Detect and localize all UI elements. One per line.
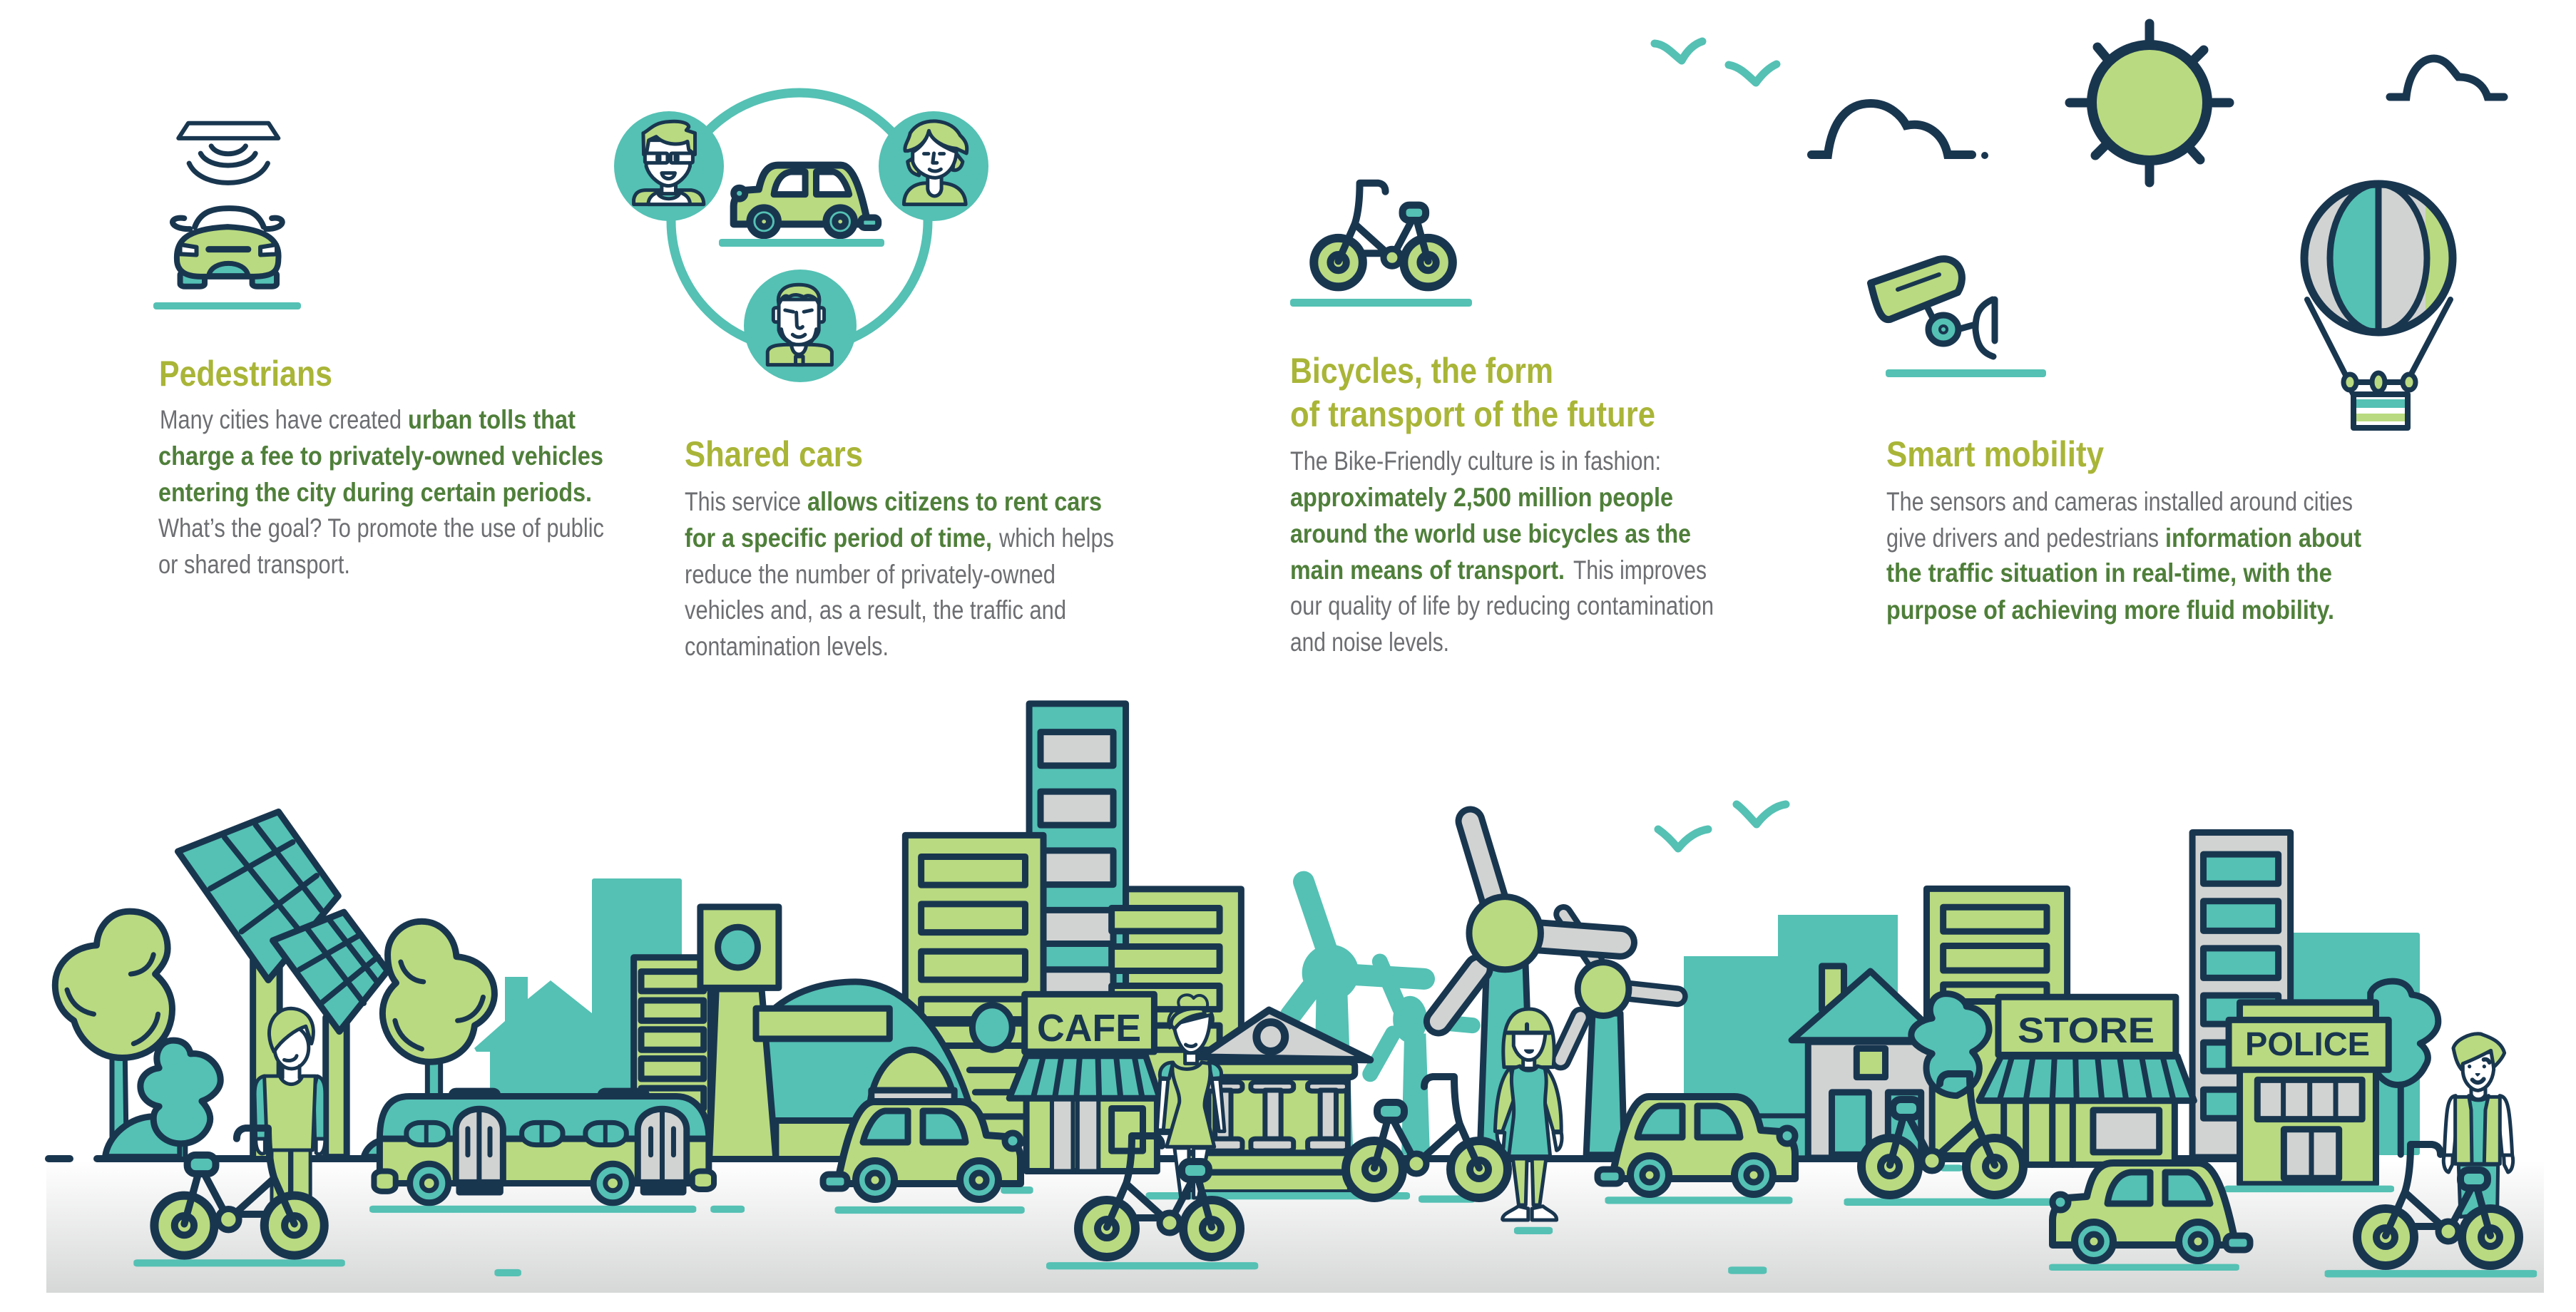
body text: the traffic situation in real-time, with the [1886, 558, 2332, 588]
body text: or shared transport. [158, 550, 350, 579]
body text: This improves [1573, 555, 1707, 585]
woman in green dress [1157, 995, 1225, 1198]
icon underline [1886, 369, 2046, 377]
teal tree [140, 1040, 220, 1159]
road marks [133, 1164, 2537, 1277]
icon underline [1290, 299, 1472, 307]
turbine large [1438, 821, 1620, 1155]
road surface [46, 1161, 2544, 1293]
store [1979, 997, 2194, 1164]
bicycle: right, with man [2357, 1144, 2519, 1266]
power plant: dome, tower and banner [634, 907, 983, 1159]
solar panel large [178, 811, 338, 980]
body text: information about [2165, 523, 2361, 553]
woman in teal dress [1495, 1009, 1562, 1220]
body text: Many cities have created [160, 405, 402, 434]
body text: reduce the number of privately-owned [685, 560, 1056, 589]
car near cafe [823, 1102, 1021, 1199]
body text: our quality of life by reducing contamination [1290, 591, 1714, 620]
person with beard [767, 285, 832, 365]
body text: The sensors and cameras installed around cities [1886, 487, 2353, 516]
tree 2 [382, 921, 494, 1096]
body text: main means of transport. [1290, 555, 1565, 585]
body text: for a specific period of time, [685, 523, 992, 553]
body text: This service [685, 487, 801, 516]
body text: give drivers and pedestrians [1886, 523, 2159, 553]
tower [710, 989, 776, 1159]
right green building [1112, 889, 1241, 1132]
body text: approximately 2,500 million people [1290, 483, 1673, 512]
police sign text: POLICE [2245, 1025, 2370, 1062]
solar panel small [273, 912, 388, 1032]
body text: and noise levels. [1290, 627, 1449, 657]
mid-right houses and shops [1759, 832, 2438, 1184]
bicycle: by bank [1346, 1077, 1508, 1198]
ground line [48, 1155, 2346, 1162]
heading: of transport of the future [1290, 394, 1655, 434]
banner [756, 1008, 889, 1039]
body text: which helps [998, 523, 1114, 553]
man in vest [2443, 1034, 2513, 1217]
small dome kiosk [869, 1050, 955, 1107]
fence [1759, 1116, 1811, 1158]
body text: The Bike-Friendly culture is in fashion: [1290, 446, 1661, 476]
house [1792, 971, 1943, 1158]
body text [1290, 446, 1714, 657]
solar panel posts [253, 957, 347, 1159]
man standing with bicycle [255, 1008, 325, 1201]
sky: hot-air balloon [2304, 184, 2453, 428]
person with wavy hair [904, 121, 967, 205]
panel: pedestrians [153, 123, 604, 579]
body text: urban tolls that [408, 405, 576, 434]
icon: toll sensor and car [173, 123, 282, 287]
body text: vehicles and, as a result, the traffic and [685, 595, 1066, 625]
turbine small [1560, 914, 1677, 1155]
cafe sign text: CAFE [1037, 1007, 1141, 1050]
dome [762, 982, 983, 1159]
icon: sharing ring with people and car [614, 93, 988, 382]
panel: shared cars [614, 93, 1114, 661]
body text [685, 487, 1114, 661]
body text: around the world use bicycles as the [1290, 519, 1691, 548]
small bush behind bus [364, 1139, 387, 1157]
icon: shared car [734, 165, 879, 235]
heading: Bicycles, the form [1290, 351, 1553, 391]
grey tower [2192, 832, 2291, 1157]
foreground wind turbines [1438, 821, 1677, 1155]
bush [105, 1117, 182, 1157]
apartment block [634, 958, 710, 1123]
teal tree by store [1911, 994, 1989, 1096]
panel: smart mobility [1871, 259, 2361, 625]
body text: purpose of achieving more fluid mobility. [1886, 595, 2334, 625]
teal tower [1029, 704, 1126, 1020]
body text: What’s the goal? To promote the use of public [158, 513, 604, 543]
heading: Pedestrians [159, 354, 332, 394]
body text: entering the city during certain periods. [158, 478, 592, 507]
bus [374, 1091, 714, 1203]
sky: large cloud [1811, 103, 1988, 158]
police station [2229, 1003, 2388, 1184]
tower sign [700, 907, 779, 988]
teal tree behind police [2371, 981, 2438, 1154]
sky: birds [1655, 41, 1786, 849]
body text [158, 405, 604, 579]
panel: bicycles [1290, 183, 1714, 657]
heading [1290, 351, 1655, 434]
body text: charge a fee to privately-owned vehicles [158, 441, 603, 471]
bicycle: left, with man [154, 1128, 324, 1256]
body text: allows citizens to rent cars [807, 487, 1102, 516]
tree 1 [55, 911, 172, 1137]
bicycle: by store [1861, 1074, 2023, 1195]
background wind turbines [1291, 882, 1473, 1155]
chimney [1822, 966, 1844, 1010]
bicycle: by cafe [1078, 1136, 1240, 1257]
city background silhouettes [474, 878, 2420, 1164]
tall downtown buildings [905, 704, 1241, 1143]
green building [1926, 888, 2068, 1158]
car by bank plaza [1598, 1097, 1795, 1194]
body text [1886, 487, 2361, 625]
icon: bicycle [1314, 183, 1453, 287]
heading: Shared cars [685, 434, 863, 474]
left green building [905, 835, 1043, 1143]
person with glasses [634, 121, 704, 205]
cafe [1009, 994, 1160, 1171]
bank building [1182, 1010, 1370, 1193]
icon underline [153, 302, 301, 309]
store sign text: STORE [2018, 1010, 2155, 1050]
heading: Smart mobility [1886, 434, 2104, 474]
icon underline [719, 239, 884, 247]
sky: small cloud [2390, 58, 2504, 97]
car in foreground [2053, 1163, 2250, 1261]
icon: traffic camera [1871, 259, 1995, 357]
sky: sun [2070, 24, 2229, 183]
body text: contamination levels. [685, 632, 889, 661]
left park: trees, bush and solar panels [55, 811, 494, 1159]
